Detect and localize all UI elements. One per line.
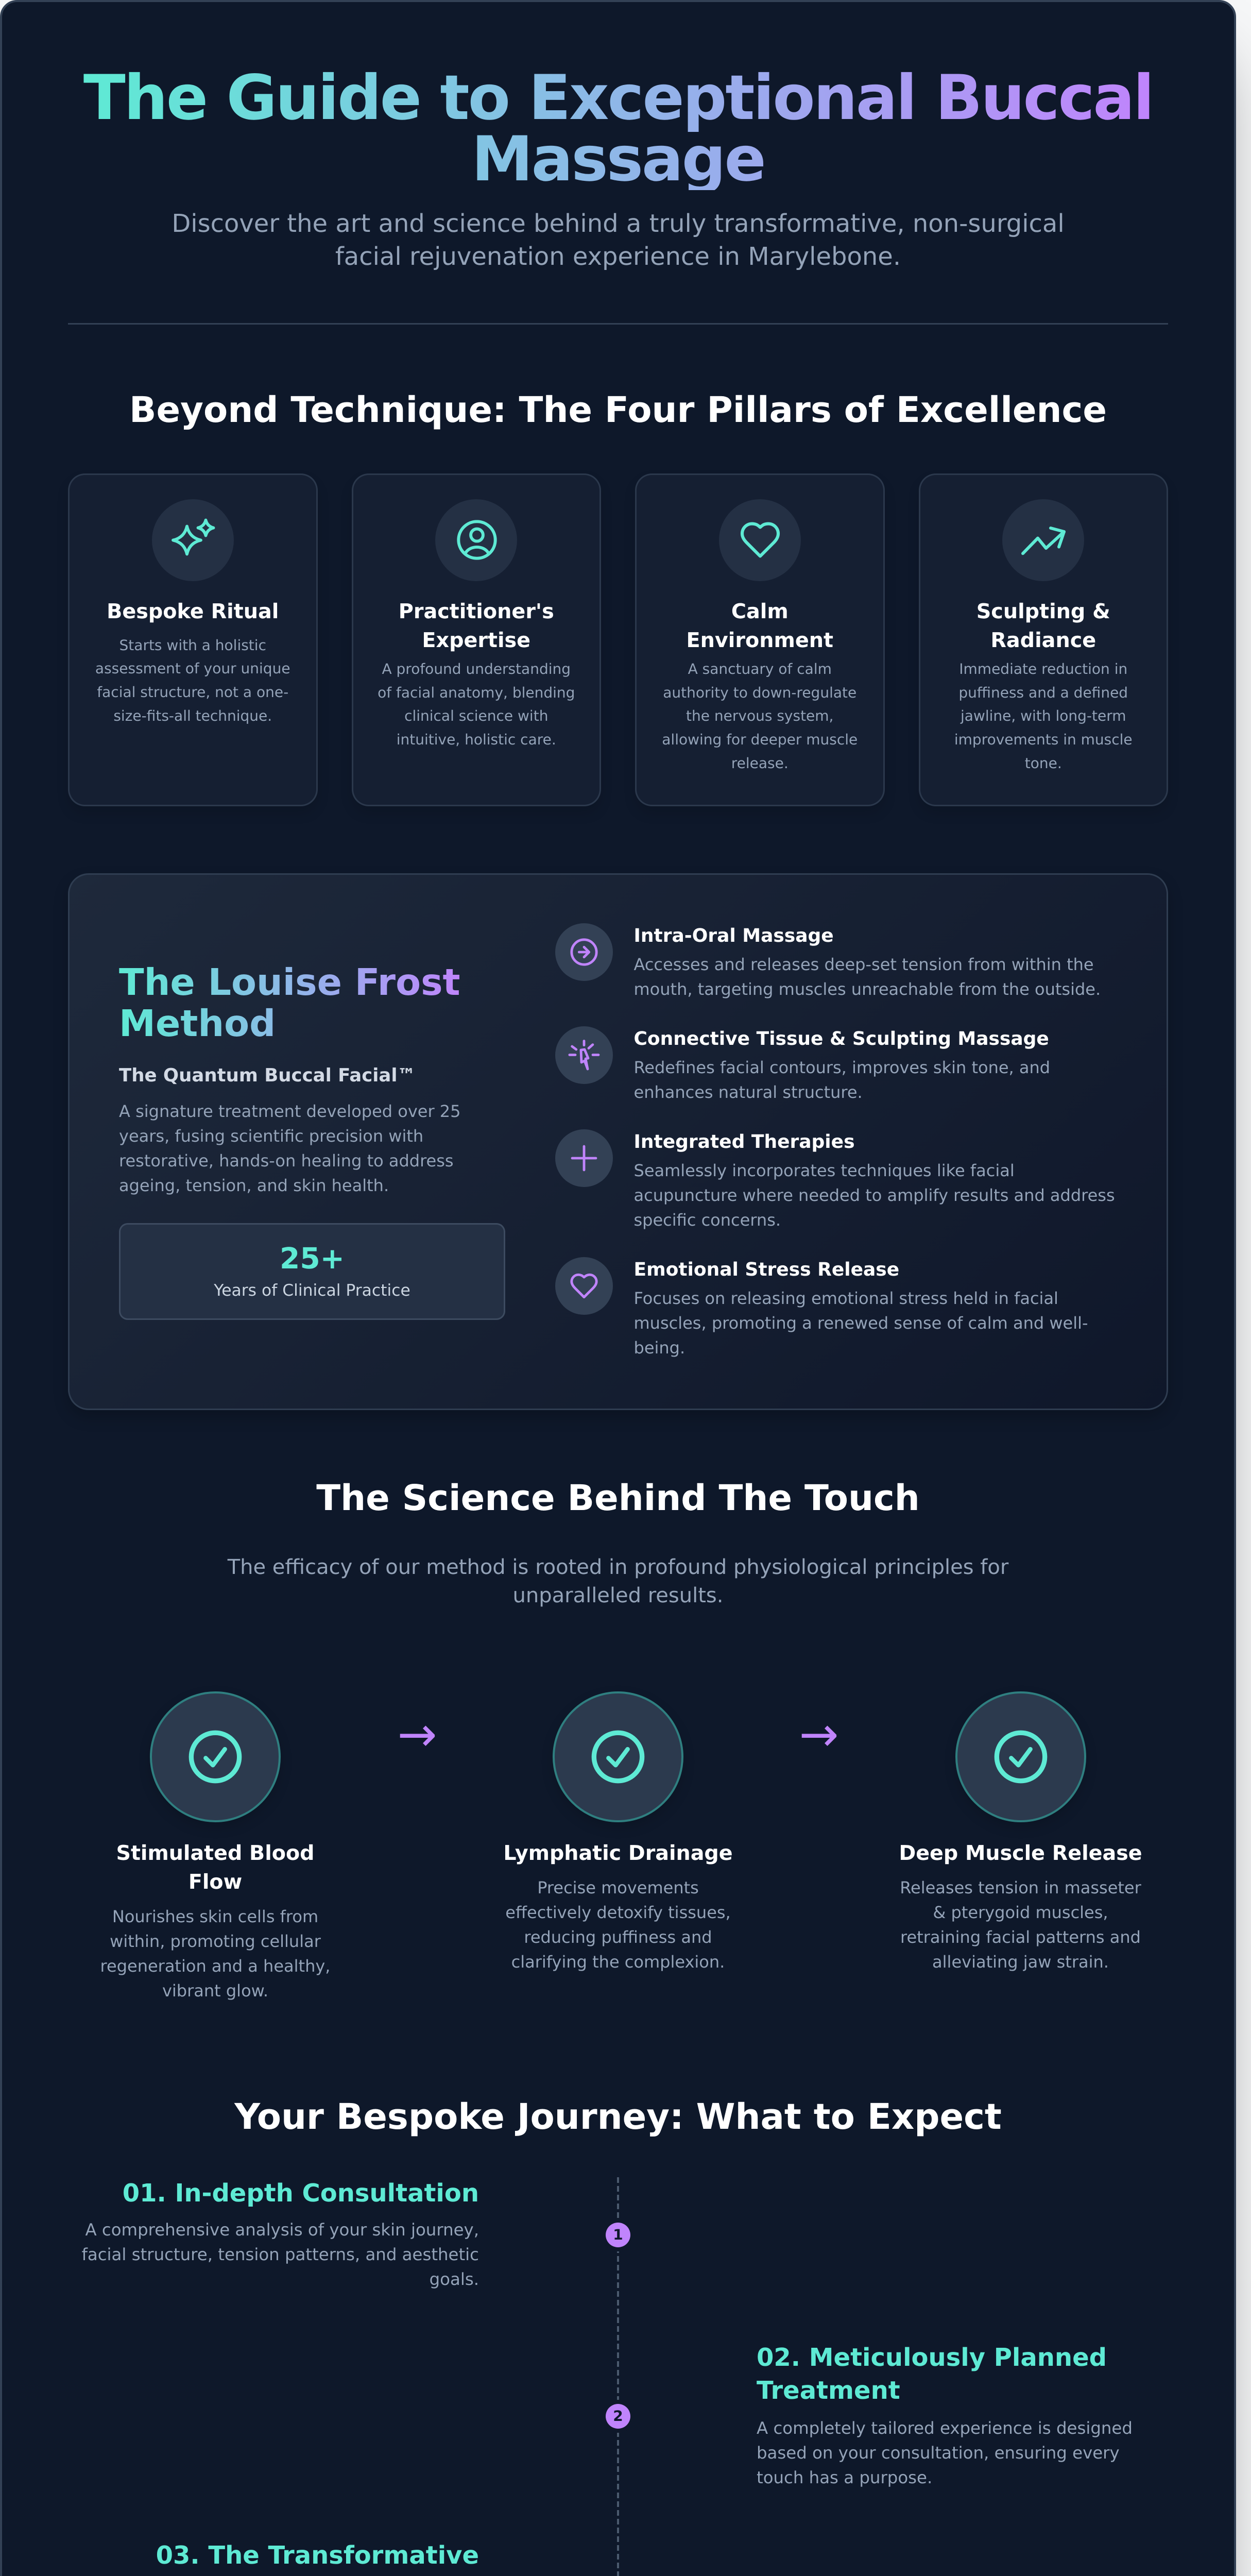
step description (494, 1875, 742, 1974)
step description: clarifying the complexion. (511, 1952, 725, 1972)
pillar title: Calm (731, 600, 789, 623)
pillar description: authority to down-regulate (663, 684, 856, 701)
item description: specific concerns. (633, 1210, 781, 1230)
step description: alleviating jaw strain. (932, 1952, 1109, 1972)
pillar title: Bespoke Ritual (107, 600, 279, 623)
pillar title: Practitioner's (399, 600, 554, 623)
pillar description: A profound understanding (382, 660, 571, 677)
item description: being. (633, 1338, 685, 1358)
pillar title (976, 600, 1110, 652)
panel: bespoke ritual (68, 473, 317, 806)
pillar description: the nervous system, (686, 707, 833, 724)
pillar description: facial structure, not a one- (97, 684, 288, 701)
icon: arrow in circle (555, 923, 613, 981)
heading: journey: Your Bespoke Journey: What to Expect (234, 2096, 1002, 2138)
science intro text: The efficacy of our method is rooted in profound physiological principles for (228, 1555, 1008, 1579)
heading: the science: The Science Behind The Touch (316, 1478, 920, 1519)
science step: deep muscle release (897, 1691, 1144, 1980)
pillar description: assessment of your unique (95, 660, 290, 677)
pillar description (662, 660, 858, 772)
arrow: → (397, 1707, 437, 1762)
step text: A comprehensive analysis of your skin journey, (85, 2220, 479, 2240)
step description: & pterygoid muscles, (933, 1903, 1108, 1922)
icon: trending up (1002, 499, 1084, 581)
title: Massage (471, 124, 765, 195)
icon: user circle (435, 499, 517, 581)
icon: sparkles (151, 499, 234, 581)
step text: A completely tailored experience is designed (757, 2418, 1133, 2438)
panel: calm environment (635, 473, 885, 806)
title (68, 67, 1168, 190)
list item: intra-oral massage (555, 923, 1101, 999)
pillar description (95, 637, 290, 724)
item description (633, 955, 1101, 999)
panel: practitioner's expertise (351, 473, 601, 806)
method title: Method (119, 1002, 276, 1045)
pillar description: allowing for deeper muscle (662, 731, 858, 748)
item title: Intra-Oral Massage (633, 925, 834, 946)
pillar description: Starts with a holistic (119, 637, 266, 654)
icon: check circle (553, 1691, 683, 1822)
icon: heart (555, 1257, 613, 1315)
subtitle (172, 209, 1065, 271)
item description: enhances natural structure. (633, 1082, 863, 1102)
panel: the Louise Frost method (68, 873, 1168, 1410)
step title: 02. Meticulously Planned (757, 2343, 1107, 2372)
pillar description: tone. (1025, 755, 1062, 772)
pillar description: puffiness and a defined (958, 684, 1128, 701)
step text: based on your consultation, ensuring every (757, 2443, 1120, 2463)
stat label: Years of Clinical Practice (214, 1281, 410, 1300)
step title: Treatment (757, 2376, 900, 2405)
list item: integrated therapies (555, 1129, 1115, 1230)
heading: four pillars: Beyond Technique: The Four Pillars of Excellence (129, 389, 1107, 431)
pillar title: Sculpting & (976, 600, 1110, 623)
list item: emotional stress release (555, 1257, 1088, 1358)
step title (757, 2341, 1168, 2407)
science step: blood flow (92, 1691, 339, 2006)
step description: regeneration and a healthy, (100, 1956, 330, 1976)
pillar description: A sanctuary of calm (688, 660, 832, 677)
step description (897, 1875, 1144, 1974)
method subtitle: The Quantum Buccal Facial™ (119, 1065, 416, 1086)
step text (68, 2217, 479, 2292)
step text: goals. (430, 2269, 479, 2289)
pillar description: jawline, with long-term (961, 707, 1126, 724)
step description: effectively detoxify tissues, (505, 1903, 731, 1922)
pillar description: of facial anatomy, blending (378, 684, 575, 701)
pillar title: Radiance (990, 629, 1096, 652)
arrow: → (799, 1707, 839, 1762)
step text: touch has a purpose. (757, 2468, 932, 2487)
icon: plus (555, 1129, 613, 1187)
stat number: 25+ (280, 1242, 345, 1276)
icon: check circle (150, 1691, 281, 1822)
step description (92, 1904, 339, 2003)
step description: Nourishes skin cells from (112, 1907, 318, 1926)
step description: retraining facial patterns and (900, 1927, 1141, 1947)
step marker 1 (606, 2223, 630, 2247)
science step: lymphatic drainage (494, 1691, 742, 1980)
step title: Lymphatic Drainage (503, 1841, 733, 1865)
step title (68, 2539, 479, 2576)
pillar description: Immediate reduction in (959, 660, 1127, 677)
step marker 2 (606, 2404, 630, 2429)
step title: 01. In-depth Consultation (123, 2179, 479, 2208)
method title (119, 962, 464, 1044)
icon: heart (719, 499, 800, 581)
step description: within, promoting cellular (110, 1931, 321, 1951)
method description: A signature treatment developed over 25 (119, 1101, 460, 1121)
item title: Connective Tissue & Sculpting Massage (633, 1028, 1049, 1049)
list item: connective tissue (555, 1026, 1050, 1102)
method description: years, fusing scientific precision with (119, 1126, 423, 1146)
pillar description: improvements in muscle (954, 731, 1133, 748)
step title: Deep Muscle Release (899, 1841, 1142, 1865)
icon: pointer click (555, 1026, 613, 1084)
item description: muscles, promoting a renewed sense of calm and well- (633, 1313, 1088, 1333)
item description: Focuses on releasing emotional stress held in facial (633, 1289, 1058, 1308)
method description: ageing, tension, and skin health. (119, 1176, 389, 1195)
method title: The Louise Frost (119, 961, 460, 1004)
pillar description (378, 660, 575, 748)
step title: Stimulated Blood (116, 1841, 314, 1865)
science intro text: unparalleled results. (513, 1584, 723, 1607)
step description: Precise movements (537, 1878, 699, 1897)
item title: Emotional Stress Release (633, 1259, 899, 1280)
item description: Accesses and releases deep-set tension from within the (633, 955, 1094, 974)
pillar title (687, 600, 833, 652)
step title: Flow (188, 1870, 242, 1894)
pillar description: clinical science with (404, 707, 548, 724)
subtitle: facial rejuvenation experience in Marylebone. (335, 242, 901, 271)
pillar title: Expertise (422, 629, 530, 652)
method description (119, 1101, 460, 1195)
science intro text (68, 1553, 1168, 1610)
item description: acupuncture where needed to amplify results and address (633, 1185, 1115, 1205)
step marker 2: 2 (613, 2408, 623, 2425)
step text: facial structure, tension patterns, and aesthetic (81, 2245, 479, 2264)
step title (92, 1839, 339, 1896)
step description: vibrant glow. (162, 1981, 268, 2001)
step marker 1: 1 (613, 2226, 623, 2243)
item description: mouth, targeting muscles unreachable from the outside. (633, 979, 1101, 999)
item description (633, 1058, 1050, 1102)
step title: 03. The Transformative (156, 2541, 479, 2570)
item description: Redefines facial contours, improves skin tone, and (633, 1058, 1050, 1077)
icon: check circle (955, 1691, 1086, 1822)
title: The Guide to Exceptional Buccal (83, 62, 1153, 134)
step text (757, 2416, 1168, 2490)
step description: Releases tension in masseter (900, 1878, 1141, 1897)
pillar description: intuitive, holistic care. (397, 731, 556, 748)
panel: sculpting and radiance (919, 473, 1168, 806)
journey step 03 (68, 2539, 479, 2576)
item description: Seamlessly incorporates techniques like facial (633, 1161, 1015, 1180)
pillar description: release. (731, 755, 789, 772)
subtitle: Discover the art and science behind a truly transformative, non-surgical (172, 209, 1065, 238)
pillar description (954, 660, 1133, 772)
pillar description: size-fits-all technique. (113, 707, 272, 724)
item description (633, 1286, 1088, 1360)
timeline (587, 2177, 649, 2576)
pillar title (399, 600, 554, 652)
stat box: 25+ years (119, 1223, 505, 1320)
item description (633, 1161, 1115, 1230)
journey step 02 (757, 2341, 1168, 2490)
journey step 01 (68, 2177, 479, 2292)
pillar title: Environment (687, 629, 833, 652)
method description: restorative, hands-on healing to address (119, 1151, 454, 1171)
step description: reducing puffiness and (524, 1927, 712, 1947)
item title: Integrated Therapies (633, 1131, 855, 1153)
